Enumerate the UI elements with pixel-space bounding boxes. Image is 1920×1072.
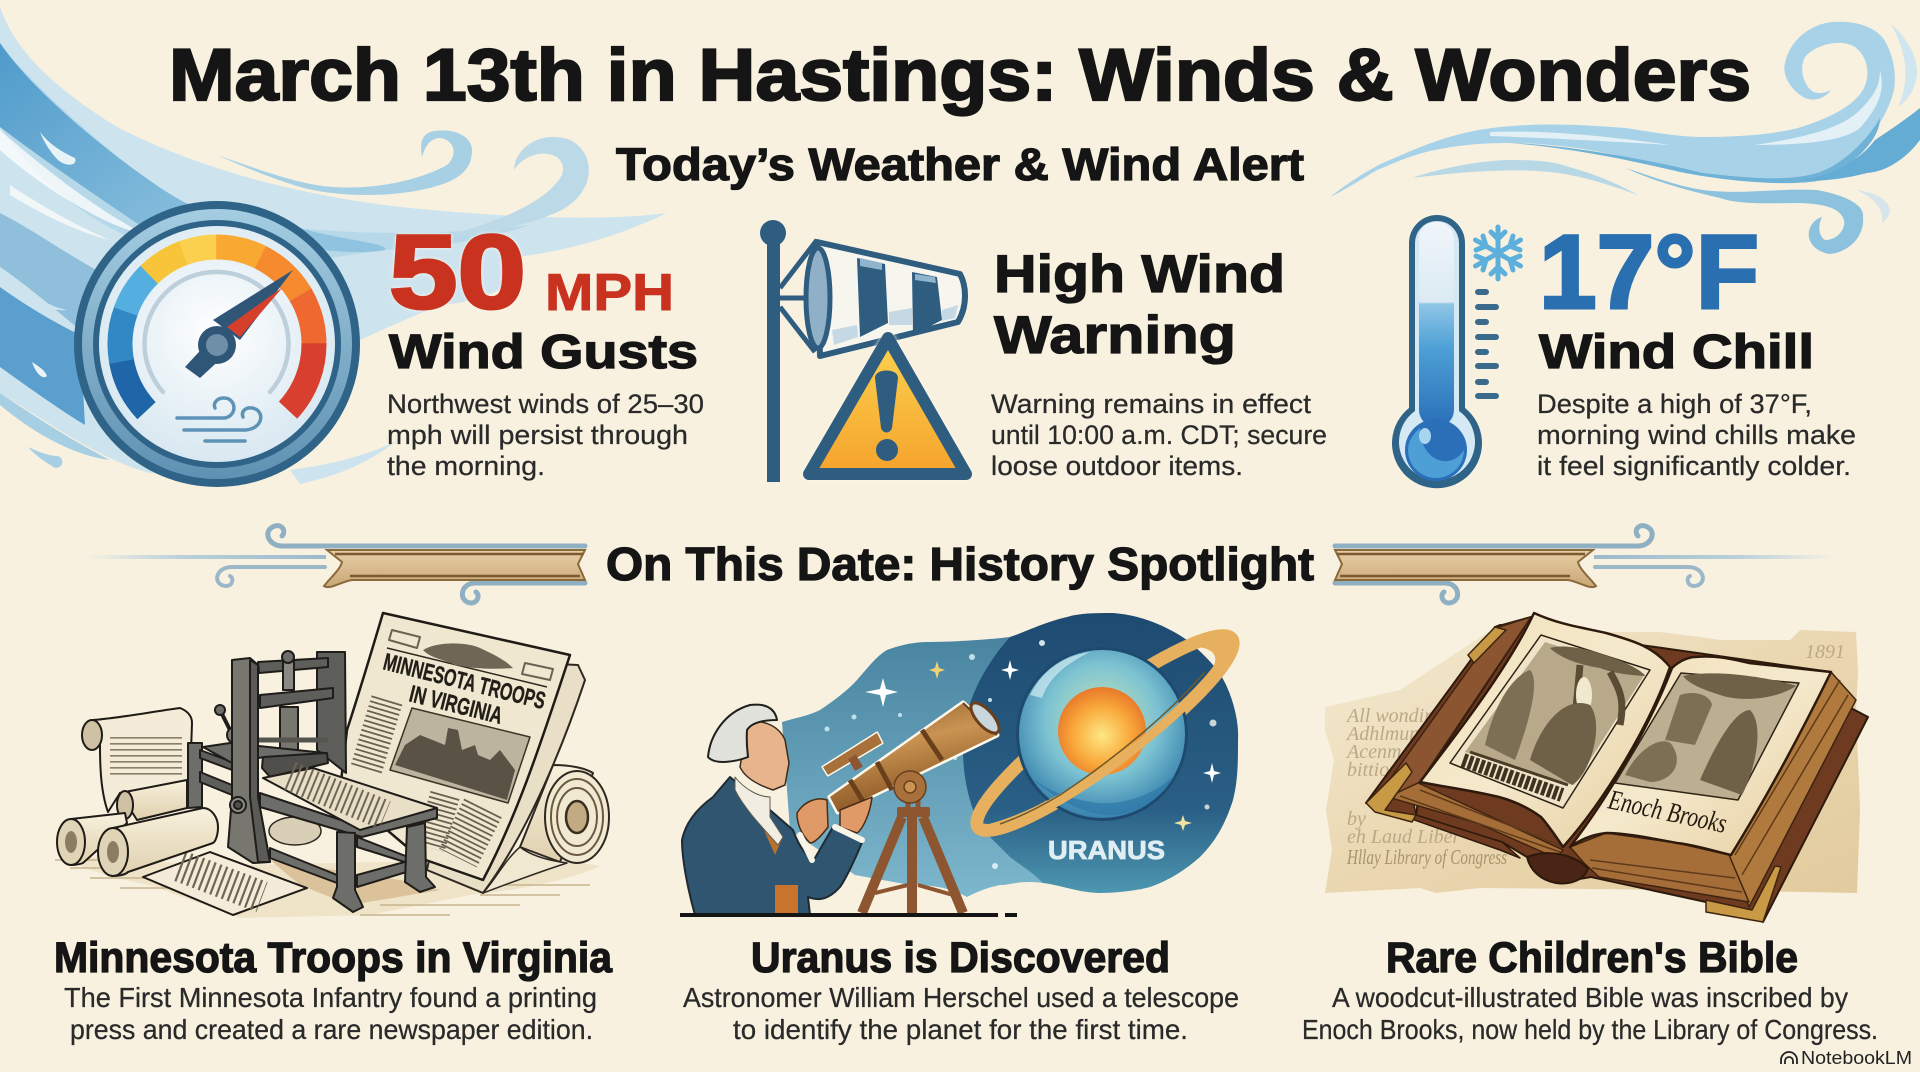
icon: windsock and warning triangle (760, 220, 966, 482)
history item: Uranus discovered: Uranus is Discovered (751, 934, 1170, 982)
small wind glyph (177, 398, 261, 441)
stat: high wind warning (991, 245, 1327, 481)
gauge needle (185, 270, 293, 378)
history item: rare children's Bible: A woodcut-illustrated Bible was inscribed by (1332, 982, 1848, 1013)
right page edge block (1729, 672, 1856, 907)
planet (1016, 647, 1188, 821)
faded script on parchment: Hllay Library of Congress (1346, 845, 1507, 869)
faded script on parchment: bittion (1347, 759, 1399, 781)
stat: high wind warning: until 10:00 a.m. CDT; secure (991, 420, 1327, 450)
planet name: URANUS (1048, 835, 1165, 865)
heading: history spotlight: On This Date: History Spotlight (606, 538, 1314, 590)
stars (824, 640, 1221, 869)
stat: 17°F wind chill: Despite a high of 37°F, (1537, 389, 1812, 419)
newspaper (340, 613, 585, 893)
stat: 50 mph wind gusts: Northwest winds of 25–30 (387, 389, 704, 419)
printing press frame (188, 651, 346, 863)
stat: 17°F wind chill: 17°F (1539, 214, 1759, 331)
faded script on parchment: Adhlmunds (1345, 723, 1437, 745)
book cover (1366, 617, 1868, 922)
astronomer figure (682, 705, 872, 915)
right hand (840, 797, 872, 833)
stat: 17°F wind chill: morning wind chills make (1537, 420, 1856, 450)
right wind swirl (1330, 22, 1920, 254)
warning triangle (809, 338, 966, 474)
paper roll right (483, 765, 609, 893)
left page edge block (1388, 782, 1563, 858)
planet ring front (973, 635, 1237, 836)
faded script on parchment: All wondirdiv (1345, 705, 1456, 727)
gold corners (1366, 627, 1781, 922)
newspaper: IN VIRGINIA (407, 681, 505, 730)
illustration: printing press and newspaper (55, 613, 609, 918)
spine curve (1527, 853, 1588, 883)
title: March 13th in Hastings: Winds & Wonders (169, 35, 1751, 116)
left ribbon divider (86, 526, 585, 603)
stat: 50 mph wind gusts: mph will persist through (387, 420, 688, 450)
left engraving (1450, 635, 1650, 808)
history item: Minnesota troops: press and created a rare newspaper edition. (70, 1014, 593, 1045)
press under-roll (269, 817, 321, 845)
snowflake (1476, 227, 1520, 279)
right engraving (1615, 673, 1799, 800)
stat: 50 mph wind gusts: the morning. (387, 451, 545, 481)
faded script on parchment: Acenm (1345, 741, 1401, 763)
planet ring back (960, 614, 1250, 852)
stat: 50 mph wind gusts: Wind Gusts (389, 326, 698, 379)
left hand (797, 799, 828, 843)
faded script on parchment: by (1347, 808, 1366, 830)
history item: Minnesota troops (54, 934, 613, 1045)
waistcoat (775, 885, 798, 915)
stat: 50 mph wind gusts: 50 (389, 214, 526, 331)
front page edge block (1570, 833, 1749, 902)
parchment (1325, 630, 1860, 893)
NotebookLM watermark: NotebookLM (1801, 1048, 1912, 1068)
ground line (680, 913, 1017, 917)
dark space behind planet (963, 613, 1238, 893)
stat: high wind warning: loose outdoor items. (991, 451, 1243, 481)
stat: 17°F wind chill (1537, 214, 1856, 481)
right page (1570, 657, 1831, 855)
history item: Uranus discovered: to identify the planet for the first time. (733, 1014, 1188, 1045)
stat: 50 mph wind gusts: MPH (545, 264, 674, 322)
handwritten inscription: Enoch Brooks (1605, 784, 1729, 840)
history item: Uranus discovered (683, 934, 1239, 1045)
stat: high wind warning: Warning remains in effect (991, 389, 1312, 419)
thermometer ticks (1478, 292, 1496, 396)
stat: high wind warning: Warning (994, 306, 1236, 365)
history item: Minnesota troops: The First Minnesota Infantry found a printing (64, 982, 597, 1013)
faded script on parchment (1345, 641, 1845, 869)
powdered wig (708, 705, 777, 762)
stat: 50 mph wind gusts (387, 214, 704, 481)
faded script on parchment: 1891 (1805, 641, 1845, 663)
sky background (782, 630, 1100, 897)
faded script on parchment: eh Laud Liber (1347, 826, 1461, 848)
history item: Uranus discovered: Astronomer William Herschel used a telescope (683, 982, 1239, 1013)
press bed and legs (260, 768, 437, 912)
telescope (823, 699, 1004, 812)
right ribbon divider (1335, 526, 1834, 603)
coat (682, 777, 863, 915)
tripod (862, 787, 963, 913)
left page (1420, 613, 1670, 847)
face (740, 722, 789, 790)
stat: 17°F wind chill: Wind Chill (1539, 326, 1814, 379)
inner cover strip (1375, 617, 1531, 800)
subtitle: weather section heading: Today’s Weather & Wind Alert (616, 139, 1304, 190)
left wind swooshes (0, 7, 667, 484)
icon: wind speed gauge (74, 201, 360, 487)
history item: rare children's Bible: Rare Children's Bible (1386, 934, 1798, 982)
history item: rare children's Bible (1302, 934, 1878, 1045)
newspaper headline: MINNESOTA TROOPS (381, 649, 548, 715)
stat: 17°F wind chill: it feel significantly colder. (1537, 451, 1851, 481)
icon: thermometer with snowflake (1392, 215, 1520, 488)
newspaper photo (390, 708, 530, 803)
illustration: open Bible on parchment (1325, 613, 1868, 922)
stat: high wind warning: High Wind (994, 245, 1285, 304)
history item: Minnesota troops: Minnesota Troops in Virginia (54, 934, 613, 982)
illustration: astronomer and Uranus (680, 613, 1250, 915)
floor shading (55, 855, 600, 918)
cravat (735, 777, 783, 845)
paper scroll and rolls (57, 708, 307, 915)
